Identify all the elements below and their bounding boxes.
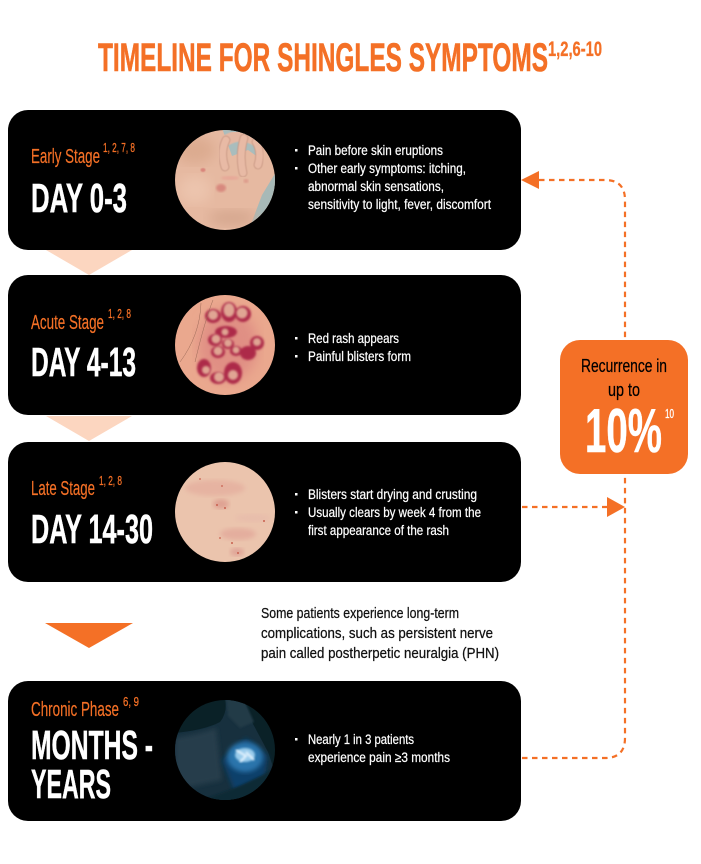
early stage label: Early Stage (31, 146, 100, 168)
chronic phase duration (31, 722, 153, 807)
title: 1,2,6-10 (548, 38, 602, 61)
acute stage day range: DAY 4-13 (31, 339, 136, 385)
late stage symptoms (295, 487, 481, 538)
late stage symptoms: Usually clears by week 4 from the (308, 505, 481, 520)
chronic phase symptoms (295, 732, 450, 765)
early stage symptoms: abnormal skin sensations, (308, 179, 444, 194)
late stage symptoms: first appearance of the rash (308, 523, 449, 538)
chronic phase label (31, 694, 139, 721)
acute stage symptoms: Red rash appears (308, 331, 399, 346)
early stage symptoms: Pain before skin eruptions (308, 143, 443, 158)
text block: long-term complications: Some patients experience long-term (261, 605, 459, 622)
arrow: late stage to chronic phase (45, 623, 133, 648)
photo: crusting rash (175, 462, 275, 562)
acute stage label: 1, 2, 8 (108, 306, 131, 321)
chronic phase label: Chronic Phase (31, 699, 119, 721)
text block: long-term complications: pain called postherpetic neuralgia (PHN) (261, 645, 499, 662)
photo: glowing shoulder nerve pain (175, 698, 276, 805)
panel: chronic phase (8, 681, 521, 821)
photo: red blisters (175, 295, 275, 395)
arrow: recurrence loop back to early stage (521, 171, 625, 340)
late stage label: Late Stage (31, 478, 95, 500)
acute stage symptoms (295, 331, 411, 364)
chronic phase symptoms: experience pain ≥3 months (308, 750, 450, 765)
arrow: chronic phase to recurrence line (522, 476, 625, 758)
text block: long-term complications: complications, such as persistent nerve (261, 625, 493, 642)
callout: recurrence: Recurrence in (581, 356, 667, 376)
arrow: late stage to recurrence line (522, 497, 625, 517)
panel: late stage (8, 442, 521, 582)
photo: scratching shoulder (175, 128, 276, 232)
early stage symptoms (295, 143, 491, 212)
acute stage label: Acute Stage (31, 312, 104, 334)
panel: acute stage (8, 275, 521, 415)
callout: recurrence: up to (608, 380, 640, 400)
early stage label: 1, 2, 7, 8 (103, 140, 135, 155)
late stage day range: DAY 14-30 (31, 506, 153, 552)
late stage label: 1, 2, 8 (99, 473, 122, 488)
early stage symptoms: Other early symptoms: itching, (308, 161, 466, 176)
early stage symptoms: sensitivity to light, fever, discomfort (308, 197, 491, 212)
text block: long-term complications (261, 605, 499, 662)
callout: recurrence: 10 (665, 406, 674, 421)
callout: recurrence (560, 340, 688, 474)
chronic phase duration: YEARS (31, 761, 111, 807)
panel: early stage (8, 110, 521, 250)
acute stage symptoms: Painful blisters form (308, 349, 411, 364)
early stage day range: DAY 0-3 (31, 175, 127, 221)
chronic phase duration: MONTHS - (31, 722, 153, 768)
late stage symptoms: Blisters start drying and crusting (308, 487, 477, 502)
chronic phase label: 6, 9 (123, 694, 139, 709)
chronic phase symptoms: Nearly 1 in 3 patients (308, 732, 414, 747)
arrow: early to acute stage (46, 250, 132, 275)
arrow: acute to late stage (46, 416, 132, 441)
